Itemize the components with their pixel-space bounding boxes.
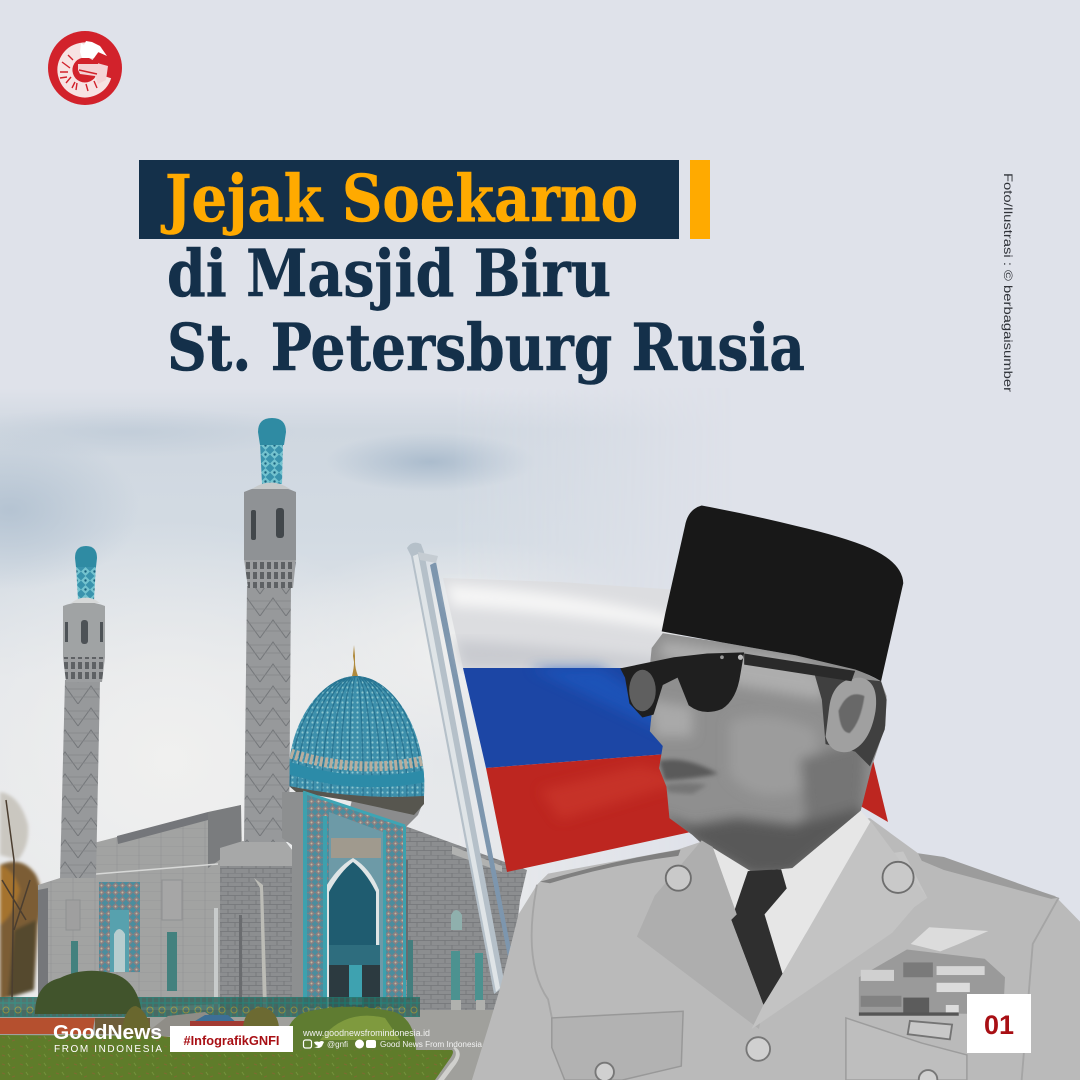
shirt collar	[713, 811, 871, 1005]
title line 1: Jejak Soekarno	[161, 161, 638, 237]
flag white band	[443, 578, 680, 668]
ground	[0, 971, 510, 1080]
dome	[289, 645, 424, 826]
tower block	[220, 841, 292, 1012]
right wing	[405, 826, 527, 1032]
small badge	[908, 1021, 952, 1039]
photo credit: Foto/Ilustrasi : © berbagaisumber	[1001, 173, 1015, 392]
collar pins	[666, 862, 914, 893]
sky photo	[0, 407, 591, 997]
curb	[438, 1047, 460, 1080]
grass	[0, 1035, 453, 1080]
right lapel	[752, 821, 927, 1029]
title accent bar	[690, 160, 710, 239]
flag blue band	[463, 668, 680, 768]
cars	[95, 1012, 245, 1036]
page number: 01	[984, 1010, 1014, 1040]
mosque	[38, 418, 527, 1032]
hashtag label: #InfografikGNFI	[184, 1034, 280, 1048]
main portal	[303, 792, 406, 1010]
sunglasses	[620, 652, 855, 718]
social icons and handles: Good News From Indonesia	[380, 1040, 483, 1049]
GoodNews wordmark: GoodNews	[53, 1022, 162, 1044]
small bushes	[243, 1007, 279, 1027]
man portrait	[472, 506, 1080, 1080]
face and neck	[650, 633, 886, 871]
shoulder straps	[540, 850, 681, 883]
necktie	[731, 869, 787, 1005]
title	[139, 160, 805, 386]
left wing	[38, 805, 243, 1013]
title line 3: St. Petersburg Rusia	[167, 310, 805, 386]
title highlight bar	[139, 160, 679, 239]
Russian flag	[443, 578, 888, 872]
flagpole	[407, 543, 513, 994]
ear	[826, 678, 876, 752]
right pocket	[846, 1018, 967, 1080]
fence	[0, 997, 420, 1017]
peci hat	[662, 506, 903, 681]
left minaret	[60, 546, 105, 878]
buttons	[595, 1037, 937, 1080]
left pocket	[552, 1011, 683, 1080]
sleeve seams	[532, 885, 1059, 1080]
From Indonesia wordmark: FROM INDONESIA	[54, 1044, 162, 1055]
title line 2: di Masjid Biru	[167, 236, 611, 312]
left lapel	[637, 840, 763, 1029]
right minaret	[244, 418, 296, 842]
logo	[48, 31, 122, 105]
left wing tiled panel	[99, 882, 140, 972]
green shrub	[285, 1007, 416, 1050]
medal ribbons	[859, 950, 1005, 1016]
uniform	[472, 818, 1080, 1080]
flag red band	[486, 753, 700, 872]
flag red tail	[850, 760, 888, 822]
hashtag label	[170, 1026, 293, 1052]
footer brand	[53, 1022, 483, 1055]
dark bush	[35, 971, 142, 1014]
tree	[0, 792, 42, 1000]
hair	[814, 674, 887, 766]
wings badge	[911, 927, 988, 951]
website: www.goodnewsfromindonesia.id	[302, 1028, 430, 1038]
collar tabs	[655, 842, 702, 907]
social icons and handles	[304, 1040, 483, 1049]
center pier	[282, 792, 303, 1012]
social icons and handles: @gnfi	[327, 1040, 348, 1049]
page number	[967, 994, 1031, 1053]
red hedge	[0, 1018, 95, 1034]
